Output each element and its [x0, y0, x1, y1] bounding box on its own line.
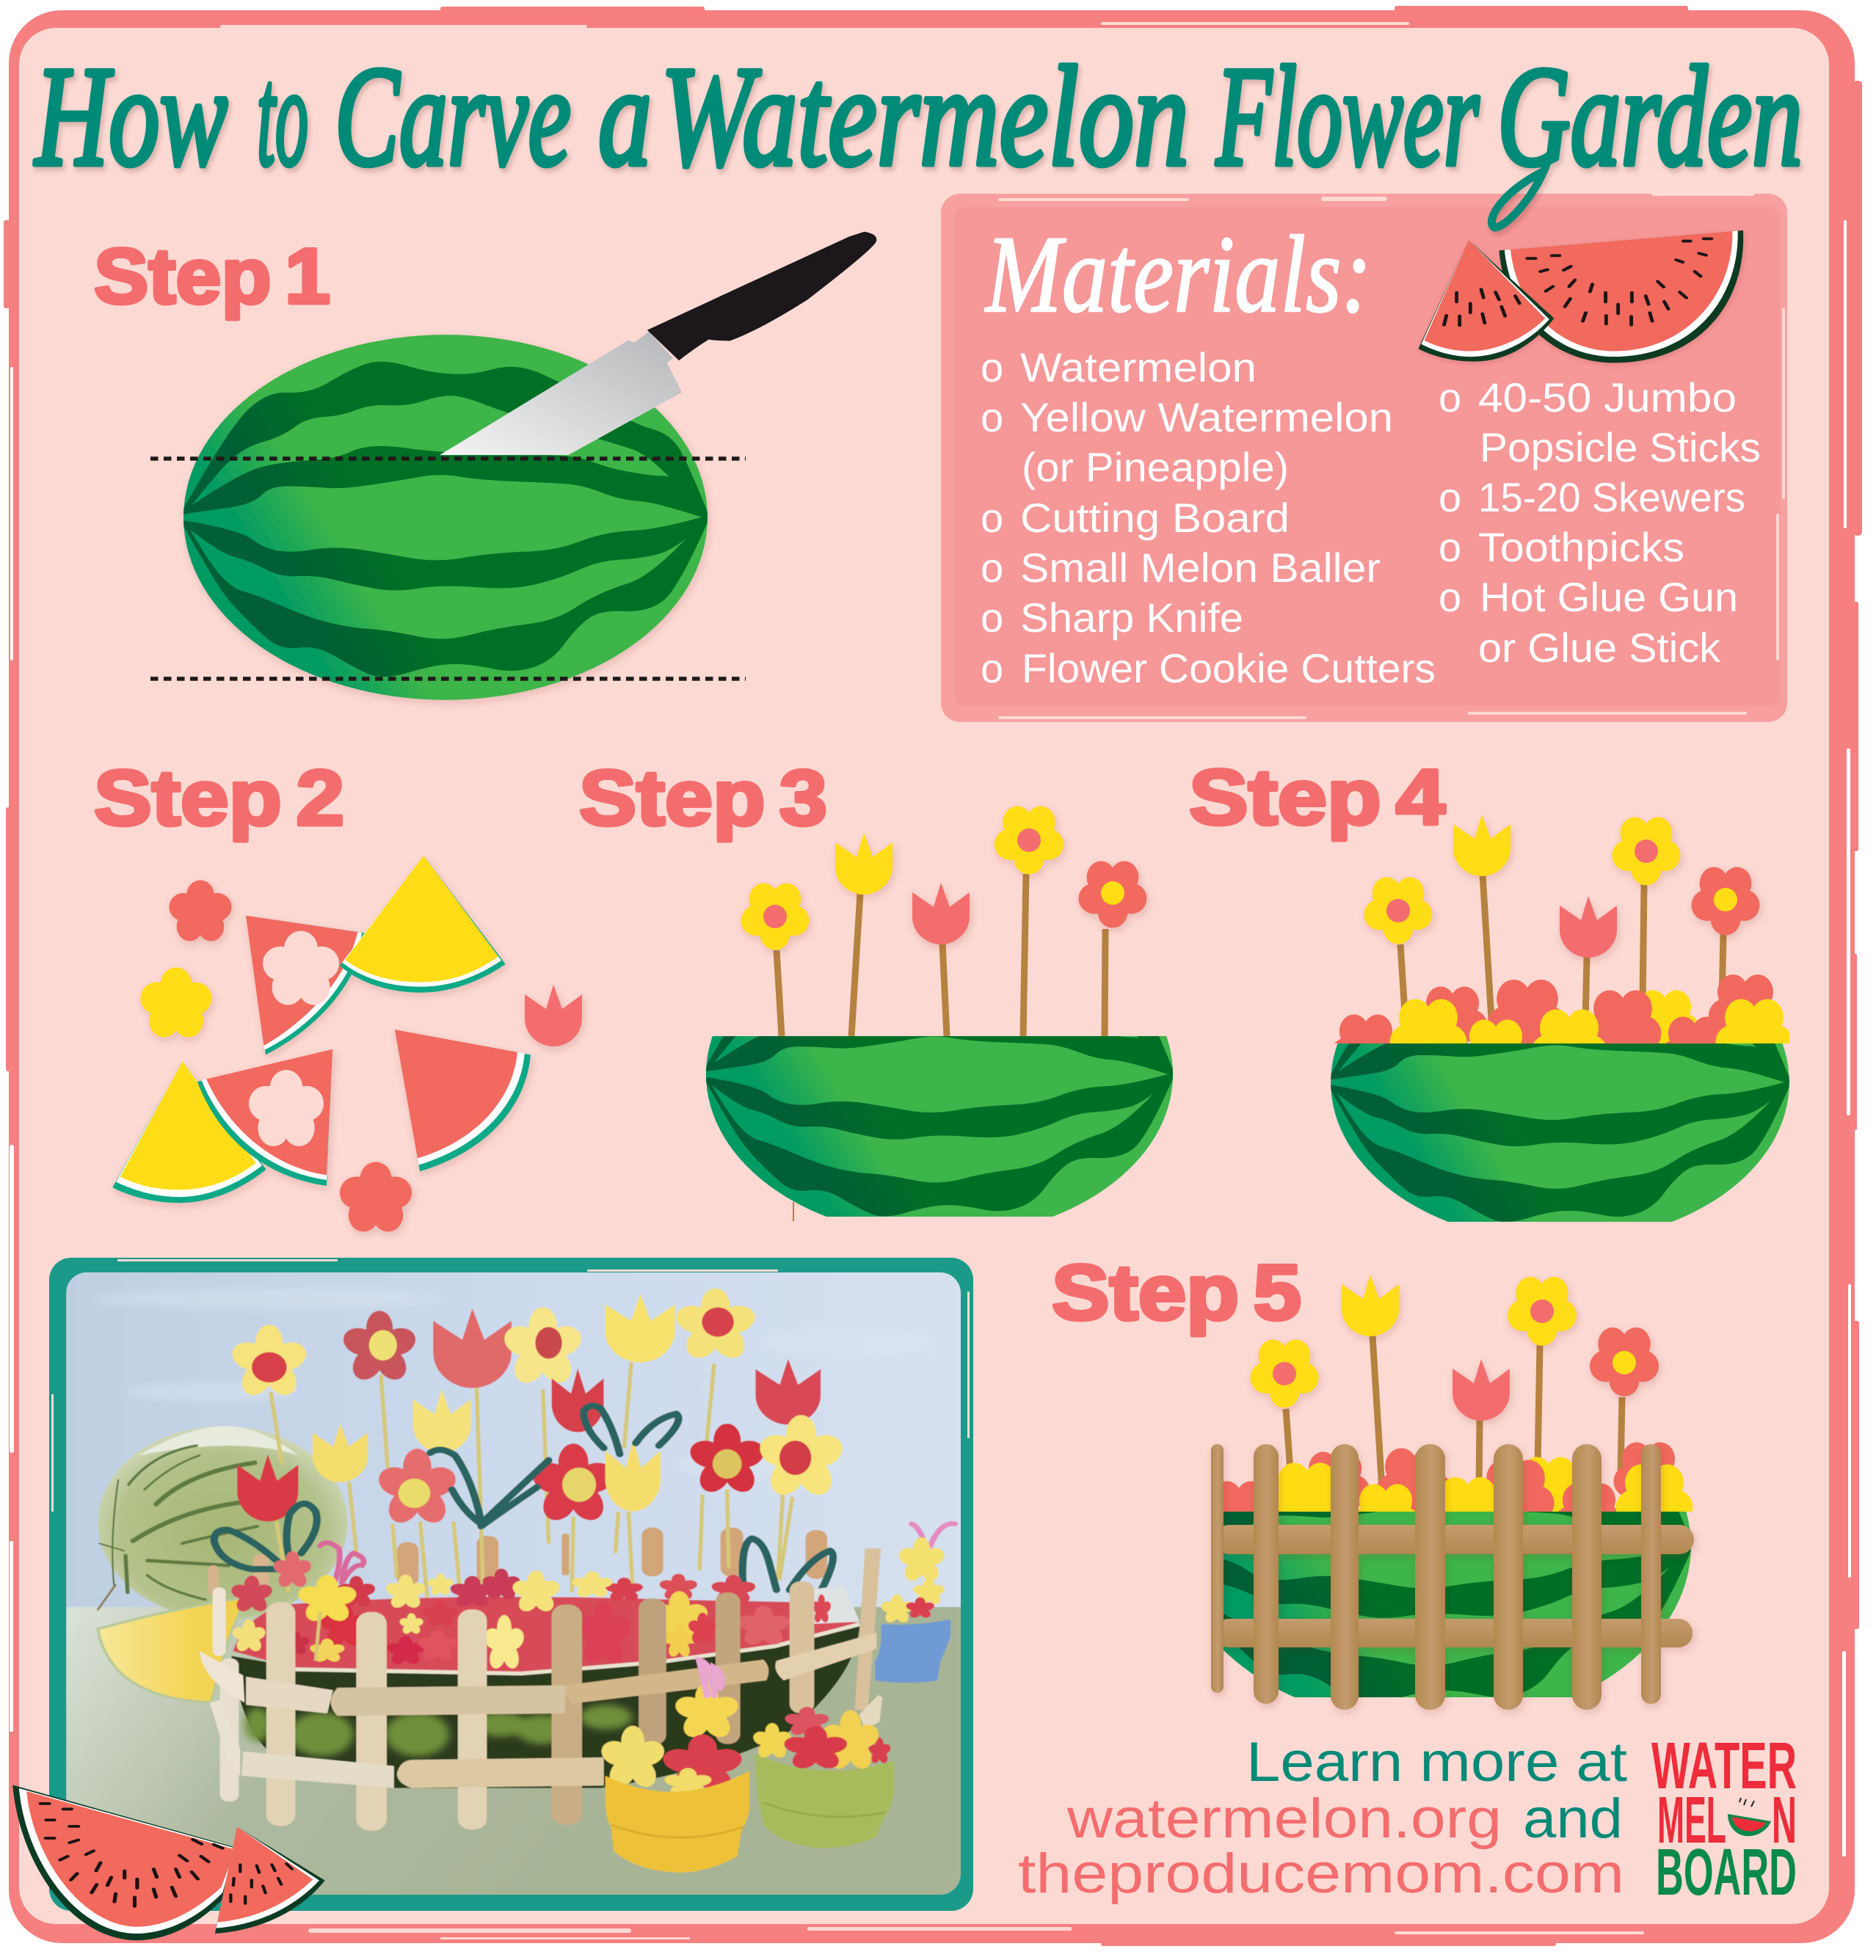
materials list right: o — [1439, 524, 1461, 570]
materials list left: Watermelon — [1020, 344, 1257, 390]
food photo illustration — [66, 1269, 966, 1901]
materials list right — [1439, 374, 1761, 671]
step 4 flowers — [1364, 815, 1760, 958]
title: to — [257, 37, 308, 196]
icon: watermelon slices — [1418, 230, 1743, 363]
call to action text: watermelon.org — [1066, 1788, 1502, 1850]
materials list left: o — [981, 495, 1003, 541]
step 4 fruit pile — [1334, 974, 1789, 1043]
yellow wedge — [98, 1597, 246, 1702]
watermelon board logo — [1651, 1730, 1797, 1909]
call to action text: and — [1523, 1788, 1623, 1850]
panel: finished photo — [49, 1258, 973, 1911]
icon: watermelon slices over photo corner — [12, 1785, 325, 1940]
step 5 watermelon bowl — [1224, 1512, 1691, 1697]
dotted cut lines — [150, 459, 746, 679]
materials list left: Flower Cookie Cutters — [1022, 645, 1436, 691]
title: How — [34, 37, 228, 196]
materials list right: o — [1439, 374, 1461, 420]
materials list left: o — [981, 544, 1003, 591]
step 5 popsicle fence — [1211, 1444, 1694, 1710]
carved melon bowl — [231, 1585, 859, 1788]
step 3 heading: Step 3 — [579, 754, 827, 842]
watermelon board logo: MEL — [1657, 1784, 1726, 1857]
title: Carve — [335, 37, 571, 196]
materials list right: o — [1439, 574, 1461, 620]
materials list right: 15-20 Skewers — [1478, 474, 1745, 520]
icon: knife — [440, 232, 876, 455]
materials list right: Toothpicks — [1478, 524, 1684, 570]
step 5 skewers — [1286, 1336, 1622, 1490]
materials list left: Sharp Knife — [1020, 594, 1243, 641]
step 3 flowers — [741, 806, 1146, 950]
materials list left: Yellow Watermelon — [1020, 394, 1393, 440]
logo melon icon — [1728, 1798, 1771, 1836]
materials list right: or Glue Stick — [1478, 624, 1721, 671]
step 1 heading: Step 1 — [94, 232, 330, 320]
panel: materials — [941, 192, 1787, 722]
step 2 cut slices and shapes — [112, 856, 582, 1231]
materials list left: (or Pineapple) — [1022, 444, 1289, 490]
step 5 flowers — [1251, 1275, 1659, 1421]
step 4 watermelon bowl — [1331, 1043, 1789, 1222]
step 2 heading: Step 2 — [94, 754, 344, 842]
green cup — [752, 1707, 894, 1848]
materials list left: Cutting Board — [1020, 495, 1290, 541]
step 4 heading: Step 4 — [1189, 753, 1445, 841]
title — [34, 37, 1803, 227]
materials heading: Materials: — [984, 214, 1372, 335]
butterfly picks — [295, 1523, 955, 1661]
photo frame — [49, 1258, 973, 1911]
title: Watermelon — [661, 37, 1189, 196]
fruit flower: red top — [169, 881, 232, 941]
cookie cutter holes — [263, 930, 339, 1005]
skewered fruit flowers — [229, 1289, 846, 1529]
whole melon behind — [98, 1426, 348, 1620]
step 4 skewers — [1400, 874, 1723, 1023]
title: Flower — [1215, 37, 1480, 196]
back fence tops — [208, 1528, 827, 1596]
popsicle stick fence — [200, 1548, 882, 1831]
materials list left: o — [981, 394, 1003, 440]
materials list left: o — [981, 594, 1003, 641]
materials list left: o — [981, 645, 1003, 691]
watermelon board logo: N — [1772, 1784, 1797, 1857]
call to action text: Learn more at — [1246, 1731, 1627, 1793]
materials list left: Small Melon Baller — [1020, 544, 1381, 591]
materials list left: o — [981, 344, 1003, 390]
call to action text — [1018, 1731, 1627, 1905]
tulip cutout — [525, 985, 582, 1046]
materials list right: Hot Glue Gun — [1480, 574, 1738, 620]
fruit flower: red bottom — [340, 1162, 412, 1231]
step 3 watermelon bowl — [706, 1036, 1173, 1217]
materials list right: o — [1439, 474, 1461, 520]
fruit flower: yellow — [141, 967, 211, 1038]
materials list right: Popsicle Sticks — [1480, 424, 1761, 470]
materials list right: 40-50 Jumbo — [1478, 374, 1737, 420]
pipe cleaner stems — [214, 1406, 833, 1590]
fruit filling pile — [230, 1551, 832, 1673]
step 5 heading: Step 5 — [1052, 1248, 1301, 1336]
step 3 skewers — [777, 874, 1105, 1221]
slices group in zoom coordinates — [112, 856, 531, 1203]
title: a — [598, 37, 652, 196]
yellow cup — [598, 1661, 749, 1873]
materials list left — [981, 344, 1436, 691]
skewers — [271, 1363, 793, 1600]
blue cup — [875, 1578, 950, 1683]
call to action text: theproducemom.com — [1018, 1843, 1624, 1905]
step 1 whole watermelon — [183, 335, 708, 700]
step 5 fruit pile — [1224, 1443, 1693, 1512]
